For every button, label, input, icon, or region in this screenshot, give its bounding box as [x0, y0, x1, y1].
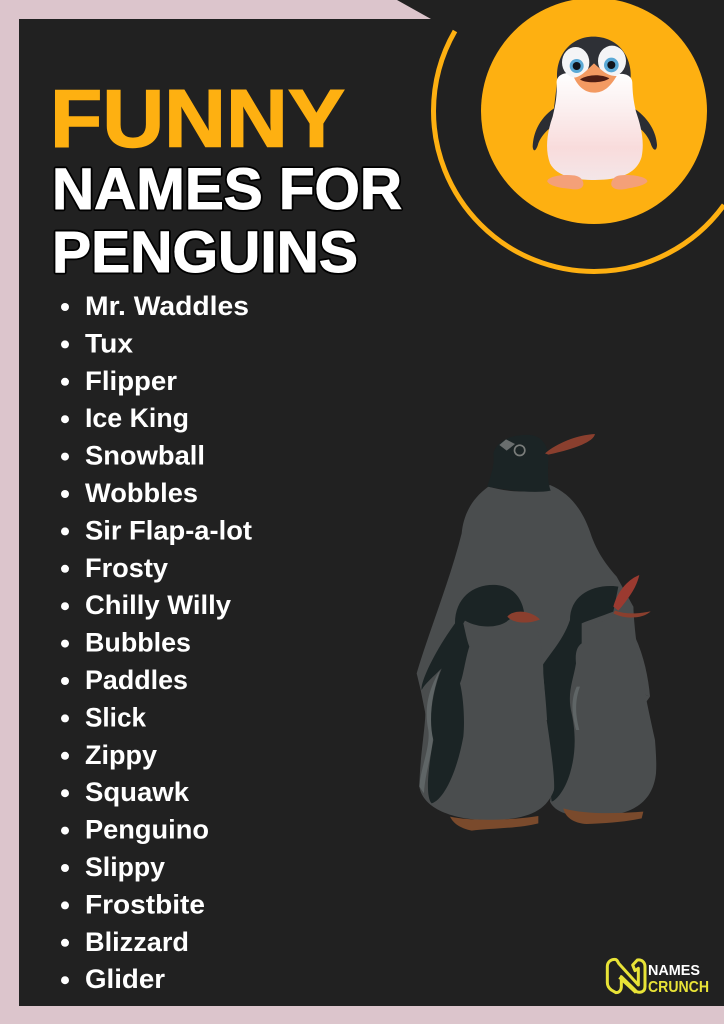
logo word: CRUNCH: CRUNCH — [648, 979, 709, 996]
left small penguin — [419, 585, 554, 831]
logo: Names Crunch — [607, 959, 709, 996]
large penguin — [417, 434, 650, 720]
names: Frosty — [85, 553, 168, 583]
names — [85, 291, 252, 994]
right small penguin — [542, 575, 656, 824]
title — [50, 74, 402, 285]
names: Zippy — [85, 740, 157, 770]
names: Chilly Willy — [85, 590, 231, 620]
names: Blizzard — [85, 927, 189, 957]
names: Slippy — [85, 852, 165, 882]
names: Squawk — [85, 777, 190, 807]
title line: PENGUINS: PENGUINS — [52, 220, 358, 285]
names: Mr. Waddles — [85, 291, 249, 321]
names: Frostbite — [85, 889, 205, 919]
illustration: faded penguin family — [417, 434, 656, 831]
title line: NAMES FOR: NAMES FOR — [52, 157, 402, 222]
names: Sir Flap-a-lot — [85, 515, 252, 545]
names: Glider — [85, 964, 165, 994]
logo word: NAMES: NAMES — [648, 962, 700, 979]
orange circle — [481, 0, 707, 224]
icon: cartoon penguin — [533, 37, 657, 190]
names: Paddles — [85, 665, 188, 695]
names: Flipper — [85, 366, 177, 396]
logo mark — [607, 959, 645, 993]
names: Wobbles — [85, 478, 198, 508]
names: Penguino — [85, 815, 209, 845]
names: Snowball — [85, 441, 205, 471]
bullets — [61, 303, 69, 984]
names: Slick — [85, 702, 147, 732]
names: Tux — [85, 328, 133, 358]
orange ring arc — [434, 31, 724, 272]
names: Bubbles — [85, 628, 191, 658]
title line: PENGUINS (fill): PENGUINS — [52, 220, 358, 285]
title line: NAMES FOR (fill): NAMES FOR — [52, 157, 402, 222]
title line: FUNNY: FUNNY — [50, 74, 345, 164]
name list — [61, 291, 252, 994]
names: Ice King — [85, 403, 189, 433]
